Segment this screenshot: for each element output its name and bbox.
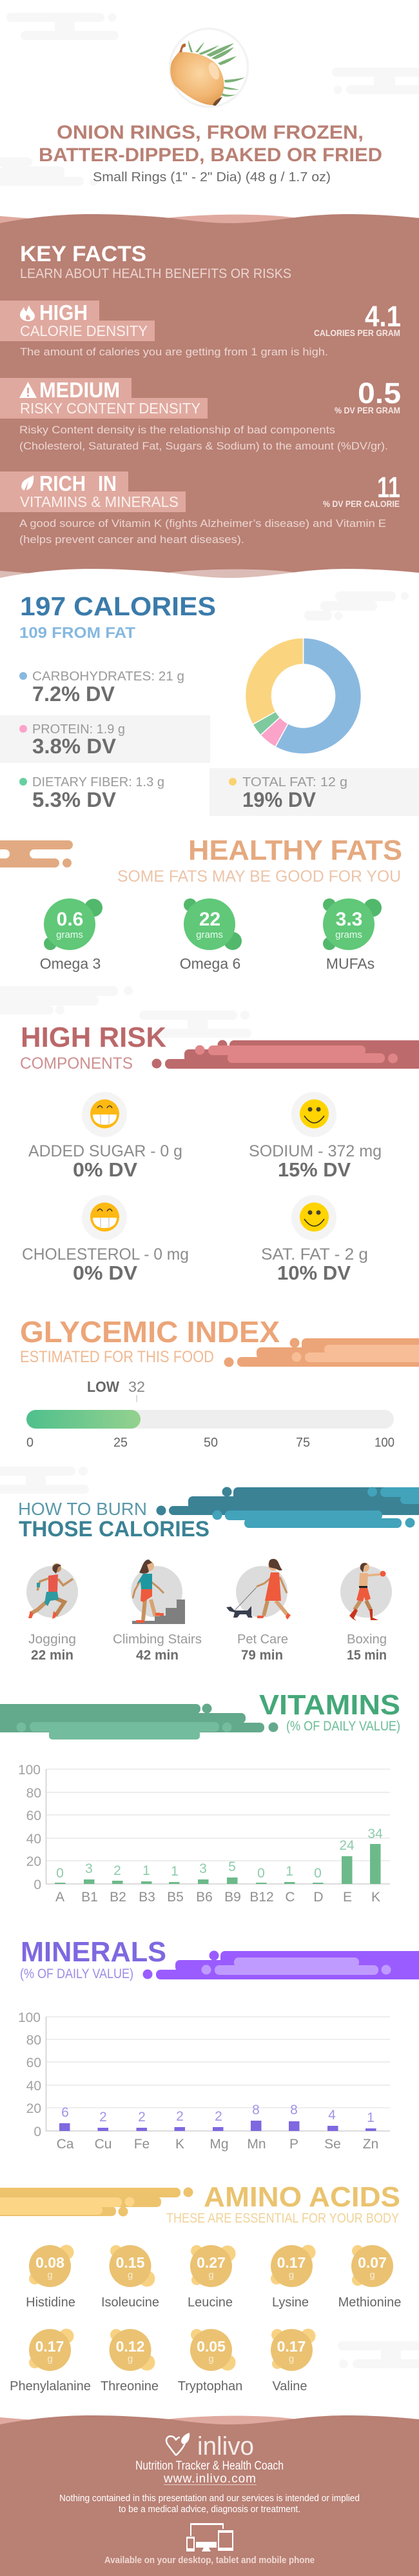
bar chart: vitamins: 80 (26, 1786, 41, 1801)
bar chart: vitamins: 1 (286, 1864, 293, 1879)
icon: onion illustration (170, 28, 248, 107)
panel: calories (0, 591, 419, 816)
decorative blob: healthy fats (0, 840, 75, 867)
nutrient: protein: PROTEIN: 1.9 g (32, 722, 125, 737)
badge: omega 6: Omega 6 (180, 955, 240, 972)
nutrient: total fat: TOTAL FAT: 12 g (242, 775, 347, 789)
bar chart: vitamins: 60 (26, 1808, 41, 1823)
stat: 11 percent dv per calorie: % DV PER CALORIE (323, 499, 400, 509)
activity: boxing: Boxing (347, 1632, 387, 1647)
bar chart: minerals: 1 (367, 2110, 375, 2125)
bar chart: minerals: 80 (26, 2033, 41, 2048)
label: rich in (39, 471, 117, 495)
badge: histidine: g (47, 2270, 53, 2281)
item: cholesterol (22, 1195, 189, 1284)
activity: jogging: Jogging (28, 1632, 76, 1647)
bar chart: vitamins: 0 (34, 1878, 41, 1892)
icon: grinning face (90, 1099, 119, 1129)
badge: phenylalanine: 0.17 (35, 2338, 64, 2355)
item: added sugar (28, 1092, 182, 1181)
badge: valine (271, 2328, 316, 2393)
nutrient: dietary fiber: 5.3% DV (32, 788, 117, 811)
stat: 0.5 percent dv per gram (335, 377, 401, 415)
title: ONION RINGS, FROM FROZEN, (57, 122, 364, 143)
nutrient: total fat: 19% DV (242, 788, 317, 811)
gauge axis: 50 (204, 1436, 218, 1450)
bar chart: minerals: Fe (134, 2137, 150, 2152)
description: Risky Content density is the relationship of bad components (19, 424, 335, 436)
decorative blob: burn (156, 1487, 419, 1528)
badge: omega 6: grams (196, 929, 223, 940)
logo: inlivo (166, 2432, 254, 2461)
heading: amino acids: AMINO ACIDS (204, 2181, 400, 2213)
bar chart: vitamins: B9 (224, 1890, 241, 1905)
badge: threonine (101, 2329, 159, 2393)
badge: lysine: Lysine (272, 2295, 309, 2310)
bar chart: vitamins: 24 (339, 1838, 355, 1853)
activity: boxing: 15 min (347, 1648, 387, 1663)
serving size subtitle: Small Rings (1" - 2" Dia) (48 g / 1.7 oz) (93, 170, 331, 184)
panel: glycemic index (20, 1315, 419, 1450)
bar chart: minerals: K (175, 2137, 184, 2152)
icon: smiling face (300, 1202, 329, 1232)
bar chart: minerals: 8 (290, 2103, 298, 2117)
badge: lysine: 0.17 (277, 2254, 306, 2271)
tagline: Nutrition Tracker & Health Coach (135, 2459, 284, 2473)
badge: mufas: grams (335, 929, 362, 940)
badge: tryptophan (178, 2329, 242, 2393)
gauge axis (26, 1436, 395, 1450)
decorative blob: vitamins (0, 1704, 278, 1739)
title (39, 122, 382, 166)
badge: histidine (26, 2244, 75, 2310)
bar chart: vitamins: 0 (314, 1866, 322, 1881)
bar chart: vitamins: 1 (171, 1864, 179, 1879)
label: high: HIGH (39, 301, 88, 324)
bar chart: vitamins: E (343, 1890, 352, 1905)
bar chart: vitamins: 2 (113, 1863, 121, 1878)
bar chart: vitamins: 0 (257, 1866, 265, 1881)
item: saturated fat: 10% DV (277, 1262, 351, 1284)
disclaimer (59, 2493, 360, 2515)
label: rich in: RICH (39, 471, 86, 495)
icon: leaf (21, 475, 34, 490)
bar chart: vitamins: D (313, 1890, 324, 1905)
fact: rich in vitamins and minerals (0, 471, 400, 546)
badge: isoleucine (101, 2245, 159, 2310)
badge: leucine: g (208, 2270, 214, 2281)
bar chart: minerals: 2 (99, 2110, 107, 2125)
panel: healthy fats (0, 835, 402, 972)
bar chart: vitamins (18, 1763, 390, 1905)
badge: lysine: g (289, 2270, 294, 2281)
badge: omega 6: 22 (199, 909, 220, 930)
bar chart: vitamins: 3 (85, 1861, 93, 1876)
badge: isoleucine: 0.15 (116, 2254, 145, 2271)
item: saturated fat: SAT. FAT - 2 g (261, 1245, 368, 1263)
nutrient: dietary fiber: DIETARY FIBER: 1.3 g (32, 775, 164, 789)
item: cholesterol: CHOLESTEROL - 0 mg (22, 1245, 189, 1263)
label: risky content density: RISKY CONTENT DENSITY (20, 400, 200, 417)
bar chart: minerals: 2 (176, 2109, 184, 2124)
icon: flame (20, 305, 35, 321)
decorative blob: high risk (152, 1040, 419, 1069)
badge: leucine: 0.27 (197, 2254, 226, 2271)
heading: vitamins: VITAMINS (259, 1689, 400, 1721)
item: saturated fat (261, 1195, 368, 1284)
bar chart: minerals: 2 (215, 2109, 222, 2124)
icon: stair climber (132, 1560, 185, 1624)
badge: omega 6 (180, 898, 242, 972)
donut chart: macronutrients (245, 638, 361, 754)
badge: mufas: 3.3 (336, 909, 362, 930)
stat: 4.1 calories per gram: CALORIES PER GRAM (314, 328, 400, 338)
gauge label: low 32: LOW (87, 1378, 119, 1395)
bar chart: vitamins: 100 (18, 1763, 41, 1778)
stat: 4.1 calories per gram: 4.1 (365, 300, 401, 333)
badge: valine: Valine (272, 2379, 307, 2393)
badge: leucine: Leucine (188, 2295, 233, 2310)
stat: 11 percent dv per calorie (323, 471, 400, 509)
bar chart: minerals: Mg (210, 2137, 229, 2152)
stat: 0.5 percent dv per gram: % DV PER GRAM (335, 405, 400, 415)
website link: www.inlivo.com (163, 2472, 256, 2486)
bar chart: vitamins: C (285, 1890, 295, 1905)
bar chart: vitamins: 5 (228, 1859, 236, 1874)
icon: boxer (349, 1563, 385, 1621)
bar chart: vitamins: B6 (196, 1890, 213, 1905)
decorative blob: glycemic (224, 1338, 419, 1367)
disclaimer: Nothing contained in this presentation and our services is intended or implied (59, 2493, 360, 2504)
icon: devices (186, 2523, 233, 2551)
bar chart: minerals: 4 (328, 2108, 336, 2123)
description (19, 517, 386, 546)
activity: climbing stairs: Climbing Stairs (113, 1632, 202, 1647)
description: A good source of Vitamin K (fights Alzheimer’s disease) and Vitamin E (19, 517, 386, 530)
badge: methionine: g (369, 2270, 375, 2281)
panel: footer (0, 2415, 419, 2576)
bar chart: minerals: 6 (61, 2105, 69, 2120)
gauge axis: 0 (26, 1436, 34, 1450)
bar chart: minerals: 100 (18, 2010, 41, 2025)
bar chart: vitamins: B3 (139, 1890, 155, 1905)
decorative blob: minerals (143, 1950, 419, 1979)
badge: isoleucine: g (128, 2270, 133, 2281)
description: (helps prevent cancer and heart diseases). (19, 533, 244, 546)
bar chart: vitamins: K (371, 1890, 380, 1905)
fact: high calorie density (0, 300, 401, 358)
subheading: components: COMPONENTS (20, 1055, 133, 1073)
bar chart: vitamins: B12 (249, 1890, 274, 1905)
heading: key facts: KEY FACTS (20, 242, 146, 266)
bar chart: vitamins: B5 (167, 1890, 184, 1905)
availability note: Available on your desktop, tablet and mobile phone (104, 2555, 315, 2566)
item: cholesterol: 0% DV (73, 1262, 137, 1284)
description: The amount of calories you are getting from 1 gram is high. (20, 346, 328, 358)
description: (Cholesterol, Saturated Fat, Sugars & Sodium) to the amount (%DV/gr). (19, 440, 388, 452)
badge: tryptophan: g (208, 2353, 214, 2364)
label: vitamins and minerals: VITAMINS & MINERALS (20, 493, 179, 510)
badge: threonine: Threonine (101, 2379, 159, 2393)
activity: pet care: Pet Care (237, 1632, 288, 1647)
icon: smiling face (300, 1099, 329, 1129)
activity: boxing (340, 1563, 392, 1663)
badge: valine: 0.17 (277, 2338, 306, 2355)
badge: methionine: 0.07 (358, 2254, 387, 2271)
badge: lysine (271, 2244, 316, 2310)
bar chart: minerals: Cu (95, 2137, 112, 2152)
panel: minerals (18, 1936, 419, 2152)
subheading: (% OF DAILY VALUE) (20, 1967, 133, 1981)
heading: those calories: THOSE CALORIES (19, 1517, 210, 1541)
heading: healthy fats: HEALTHY FATS (188, 835, 402, 866)
bar chart: minerals: Ca (57, 2137, 74, 2152)
bar chart: minerals: Se (324, 2137, 341, 2152)
gauge axis: 100 (375, 1436, 395, 1450)
bar chart: minerals: 60 (26, 2056, 41, 2070)
gauge bar (26, 1410, 394, 1429)
panel: how to burn those calories (18, 1487, 419, 1663)
panel: high risk components (20, 1022, 419, 1284)
nutrient: carbohydrates: 7.2% DV (32, 682, 115, 706)
stat: 0.5 percent dv per gram: 0.5 (358, 377, 401, 410)
bar chart: vitamins: 34 (367, 1827, 383, 1841)
panel: key facts (0, 214, 419, 584)
bar chart: vitamins: B1 (81, 1890, 98, 1905)
nutrient: total fat (229, 775, 347, 811)
panel: amino acids (0, 2181, 401, 2393)
badge: valine: g (289, 2353, 294, 2364)
activity: climbing stairs: 42 min (136, 1648, 179, 1663)
badge: threonine: g (128, 2353, 133, 2364)
item: sodium: 15% DV (278, 1158, 351, 1181)
item: sodium (249, 1092, 382, 1181)
nutrient: carbohydrates: CARBOHYDRATES: 21 g (32, 669, 184, 684)
disclaimer: to be a medical advice, diagnosis or treatment. (119, 2504, 300, 2515)
badge: phenylalanine: Phenylalanine (10, 2379, 91, 2393)
label: medium: MEDIUM (39, 378, 120, 402)
stat: 4.1 calories per gram (314, 300, 401, 338)
badge: omega 3 (40, 898, 102, 972)
bar chart: vitamins: 40 (26, 1832, 41, 1847)
activity: pet care (226, 1559, 291, 1663)
activity: climbing stairs (113, 1560, 202, 1663)
heading: how to burn: HOW TO BURN (18, 1499, 147, 1519)
nutrient: protein (19, 722, 125, 758)
bar chart: vitamins: 3 (199, 1861, 207, 1876)
bar chart: minerals: Zn (363, 2137, 378, 2152)
badge: tryptophan: 0.05 (197, 2338, 226, 2355)
badge: histidine: Histidine (26, 2295, 75, 2310)
badge: mufas: MUFAs (326, 955, 375, 972)
badge: methionine (338, 2245, 401, 2310)
logo: inlivo: inlivo (197, 2432, 254, 2461)
subheading: key facts: LEARN ABOUT HEALTH BENEFITS OR RISKS (20, 266, 291, 281)
item: sodium: SODIUM - 372 mg (249, 1142, 382, 1160)
bar chart: minerals: 2 (138, 2110, 146, 2125)
gauge label: low 32: 32 (128, 1378, 145, 1395)
bar chart: vitamins: 1 (142, 1863, 150, 1878)
badge: threonine: 0.12 (116, 2338, 144, 2355)
badge: histidine: 0.08 (35, 2254, 64, 2271)
gauge axis: 75 (296, 1436, 310, 1450)
item: added sugar: ADDED SUGAR - 0 g (28, 1142, 182, 1160)
stat: 11 percent dv per calorie: 11 (377, 471, 400, 504)
icon: woman walking dog (226, 1559, 291, 1620)
bar chart: minerals: 8 (252, 2103, 260, 2117)
subheading: from fat: 109 FROM FAT (19, 624, 135, 642)
bar chart: minerals: P (289, 2137, 298, 2152)
bar chart: vitamins: A (55, 1890, 64, 1905)
label: rich in: IN (98, 471, 117, 495)
panel: vitamins (0, 1689, 400, 1905)
bar chart: minerals: Mn (247, 2137, 266, 2152)
activity: pet care: 79 min (241, 1648, 283, 1663)
badge: phenylalanine: g (47, 2353, 53, 2364)
badge: isoleucine: Isoleucine (101, 2295, 159, 2310)
heading: high risk: HIGH RISK (21, 1022, 166, 1053)
bar chart: vitamins: B2 (110, 1890, 126, 1905)
bar chart: minerals: 0 (34, 2125, 41, 2139)
fact: medium risky content density (0, 377, 401, 452)
item: added sugar: 0% DV (73, 1158, 137, 1181)
badge: mufas (323, 898, 382, 972)
description (19, 424, 388, 452)
subheading: (% OF DAILY VALUE) (286, 1719, 400, 1734)
bar chart: minerals: 40 (26, 2079, 41, 2094)
gauge label: low 32 (87, 1378, 145, 1402)
nutrient: protein: 3.8% DV (32, 735, 117, 758)
icon: grinning face (90, 1202, 119, 1232)
activity: jogging: 22 min (31, 1648, 73, 1663)
badge: methionine: Methionine (338, 2295, 401, 2310)
badge: tryptophan: Tryptophan (178, 2379, 242, 2393)
heading: 197 calories: 197 CALORIES (20, 591, 216, 621)
bar chart: minerals: 20 (26, 2101, 41, 2116)
bar chart: minerals (18, 2010, 390, 2152)
label: calorie density: CALORIE DENSITY (20, 322, 148, 339)
subheading: ESTIMATED FOR THIS FOOD (20, 1348, 214, 1366)
activity: jogging (26, 1563, 78, 1663)
icon: warning triangle (19, 382, 37, 398)
badge: leucine (188, 2245, 236, 2310)
title: BATTER-DIPPED, BAKED OR FRIED (39, 144, 382, 166)
heading: minerals: MINERALS (21, 1936, 166, 1968)
badge: omega 3: Omega 3 (40, 955, 101, 972)
nutrient: carbohydrates (19, 669, 184, 706)
nutrient: dietary fiber (19, 775, 164, 811)
subheading: SOME FATS MAY BE GOOD FOR YOU (117, 867, 401, 886)
badge: phenylalanine (10, 2328, 91, 2393)
badge: omega 3: grams (56, 929, 83, 940)
bar chart: vitamins: 20 (26, 1854, 41, 1869)
icon: jogger (28, 1563, 73, 1619)
decorative blob: amino acids (0, 2188, 193, 2216)
heading: glycemic index: GLYCEMIC INDEX (20, 1315, 280, 1349)
bar chart: vitamins: 0 (56, 1866, 64, 1881)
gauge axis: 25 (113, 1436, 128, 1450)
badge: omega 3: 0.6 (57, 909, 83, 930)
